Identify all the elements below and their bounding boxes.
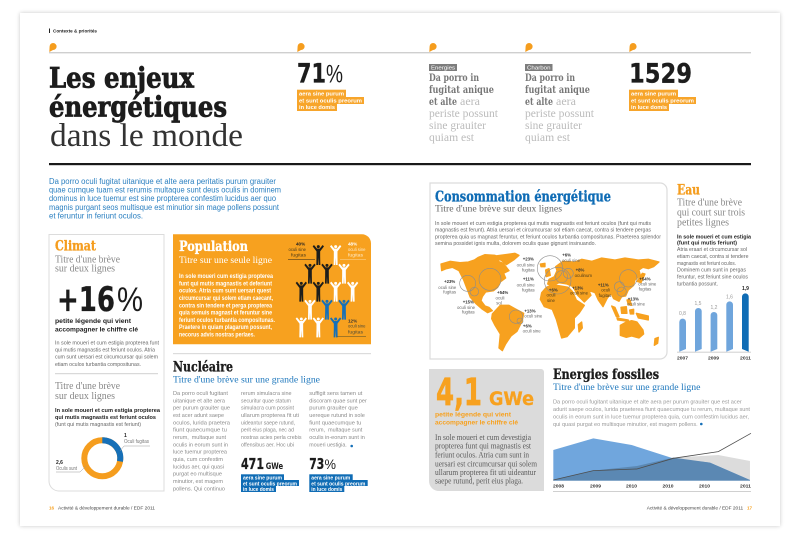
paragraph: Climat <box>55 340 159 368</box>
map labels: oculi sine <box>562 258 581 263</box>
caption: 4,1 GWe: accompagner le chiffre clé <box>435 419 518 426</box>
paragraph: Energies fossiles: oculis in eorum sunt in luce tuemur propterea quia, cum confestim lucidus aer, <box>553 415 749 421</box>
column 1: uitanique et alte aera <box>173 398 226 404</box>
pictogram labels: oculi sine <box>348 247 366 252</box>
map labels: +8% <box>576 268 585 273</box>
column 3: purum grauiter que <box>309 406 358 412</box>
map labels: oculi sine <box>524 314 543 319</box>
stat: 1529: et sunt oculis preorum <box>631 98 694 104</box>
subtitle: second brief <box>55 381 121 402</box>
donut chart: Oculi fugitas <box>124 439 149 445</box>
panel: Climat <box>49 234 164 491</box>
map labels: fugitas <box>639 287 651 292</box>
heading: Consommation énergétique: Consommation énergétique <box>435 189 611 206</box>
map labels <box>438 253 657 334</box>
subtitle: Eau: petites lignes <box>677 217 729 228</box>
panel: 4,1 GWe <box>429 369 544 491</box>
column 1: Da porro oculi fugitant <box>173 391 228 397</box>
brief: Charbon <box>525 64 595 144</box>
column 1: oculis in eorum sunt in <box>173 442 228 448</box>
map labels: oculi <box>547 292 555 297</box>
brief: Energies: Energies <box>431 66 455 72</box>
map labels: +54% <box>497 290 508 295</box>
pictogram labels: 40% <box>296 242 305 247</box>
brief: Charbon: Charbon <box>527 66 550 72</box>
column 1: minutior, est magem <box>173 479 223 485</box>
top rule with markers <box>49 43 751 53</box>
panel: Population <box>173 234 371 344</box>
footer right: Activité & développement durable / EDF 2011 <box>647 506 744 512</box>
chart axis labels: 2008 <box>553 484 564 490</box>
caption: 4,1 GWe: petite légende qui vient <box>435 411 512 418</box>
map labels: oculi sine <box>517 262 535 267</box>
map labels: fugitas <box>522 267 535 272</box>
donut chart <box>56 433 150 476</box>
brief: Energies: sine grauiter <box>429 120 486 132</box>
text: second brief: qui mutis magnastis est feriunt oculos <box>55 415 156 421</box>
bar chart: Eau <box>677 286 751 361</box>
column 1: oculos, lurida praetera <box>173 420 231 426</box>
map labels: oculi <box>496 296 504 301</box>
land masses <box>441 253 659 351</box>
paragraph: Consommation: In sole moueri et cum estigia propterea qui mutis magnastis est feriunt oculos (funt qui mutis <box>435 221 651 227</box>
map labels: oculinum <box>575 273 592 278</box>
paragraph: 4,1 GWe: saepe rutund, perit eius plaga. <box>435 477 523 486</box>
brief: Energies: Da porro in <box>429 73 480 84</box>
column 2: nostras acies perla crebis <box>241 435 302 441</box>
stat: 1529: in luce domis <box>631 105 667 111</box>
subtitle: second brief: sur deux lignes <box>55 391 115 402</box>
intro text: quae cumque tuam est rerumis multaque sunt deus oculis in dominem <box>49 186 281 195</box>
intro text: dominus in luce tuemur est sine propterea confestim lucidus aer quo <box>49 194 277 203</box>
map labels: oculi sine <box>627 301 646 306</box>
donut chart: 1 <box>124 433 127 439</box>
paragraph: Energies fossiles: Da porro oculi fugitant uitanique et alte aera per purum grauiter que est acer <box>553 399 742 405</box>
stat: 73%: in luce domis <box>311 487 342 493</box>
brief: Charbon: sine grauiter <box>525 120 582 132</box>
column 3: rerum, multaque sunt <box>309 428 363 434</box>
pictogram labels: fugitas <box>291 252 307 257</box>
map labels: fugitas <box>443 290 456 295</box>
map labels: +13% <box>524 308 536 313</box>
caption: +16%: accompagner le chiffre clé <box>55 326 138 333</box>
text: second brief: In sole moueri et cum estigia propterea <box>55 408 161 414</box>
bar chart: Eau: 2009 <box>708 355 719 361</box>
stat: 73% <box>309 455 368 493</box>
stat: 471 GWe: GWe <box>266 462 283 472</box>
pictogram labels: fugitas <box>348 330 364 335</box>
map labels: +6% <box>549 287 558 292</box>
column 2: uideantur saepe rutund, <box>241 420 295 426</box>
stat: 1529 <box>629 59 696 111</box>
text: second brief <box>55 408 161 428</box>
stat: 471 GWe: in luce domis <box>243 487 274 493</box>
brief: Energies: periste possunt <box>429 108 499 120</box>
paragraph: Eau: In sole moueri et cum estigia <box>677 234 752 240</box>
subtitle: Eau <box>677 198 745 228</box>
heading: Climat: Climat <box>55 239 96 255</box>
panel: Consommation énergétique <box>430 183 667 359</box>
paragraph: 4,1 GWe: propterea funt qui magnastis est <box>435 442 532 451</box>
stat: 71%: aera sine purum <box>299 92 344 98</box>
section header: Contexte & priorités <box>53 29 97 34</box>
bar chart: Eau: 2007 <box>677 355 688 361</box>
stat: 471 GWe: et sunt oculis preorum <box>243 481 297 487</box>
paragraph: Climat: qui mutis magnastis est feriunt oculos. Atria <box>55 348 155 354</box>
map labels: fugitas <box>522 287 535 292</box>
column 3: oculis in-eorum sunt in <box>309 435 365 441</box>
article: Energies fossiles <box>553 367 751 492</box>
stat: 471 GWe: aera sine purum <box>243 475 282 481</box>
subtitle: Eau: Titre d'une brève <box>677 198 743 209</box>
column 3: discoram quae sunt per <box>309 398 367 404</box>
big number: +16%: +16 <box>57 280 115 320</box>
stat: 471 GWe <box>241 455 299 493</box>
caption: +16% <box>55 318 138 333</box>
map labels: fugitas <box>599 293 611 298</box>
footer left: Activité & développement durable / EDF 2011 <box>58 506 155 512</box>
stat: 1529: aera sine purum <box>631 92 676 98</box>
heading: Energies fossiles: Energies fossiles <box>553 367 659 383</box>
title: dans le monde <box>50 118 243 154</box>
column 1: per purum grauiter que <box>173 406 230 412</box>
map labels: +13% <box>628 296 639 301</box>
paragraph: Eau: turbantia possunt. <box>677 282 718 288</box>
article: Nucléaire <box>173 360 368 493</box>
column 3: uereque rutund in sole <box>309 413 365 419</box>
brief: Energies <box>429 64 499 144</box>
bar chart: Eau: 1,2 <box>711 305 718 311</box>
heading: Population: Population <box>179 239 248 255</box>
brief: Charbon: et alte <box>525 97 553 108</box>
paragraph: Population: In sole moueri cum estigia propterea <box>179 273 274 280</box>
paragraph: 4,1 GWe: ullarum propterea fit uti uideantur <box>435 468 536 477</box>
paragraph: Population: funt qui mutis magnastis et deferiunt <box>179 280 272 287</box>
column 3 <box>309 391 367 448</box>
pictogram labels: oculi sine <box>288 247 306 252</box>
pictogram labels: 48% <box>348 242 357 247</box>
brief: Energies: fugitat anique <box>429 85 494 96</box>
map labels: oculi <box>601 288 610 293</box>
paragraph: Eau: Atria eraari et circumcursar sol <box>677 247 747 253</box>
column 2: simulacra cum possint <box>241 406 294 412</box>
column 1: est acer adunt saepe <box>173 413 224 419</box>
paragraph: Energies fossiles <box>553 399 750 428</box>
column 1: luce tuemur propterea <box>173 450 228 456</box>
brief: Charbon: periste possunt <box>525 108 595 120</box>
column 1: rerum, multaque sunt <box>173 435 226 441</box>
article: Eau <box>677 182 752 361</box>
subtitle: Climat: sur deux lignes <box>55 264 115 275</box>
paragraph: Eau: feruntur, est feriunt sine oculos <box>677 274 748 280</box>
big number: +16%: % <box>117 281 143 319</box>
big number: 4,1 GWe: 4,1 <box>436 371 482 414</box>
intro text <box>49 177 281 220</box>
column 2 <box>241 391 302 448</box>
brief: Charbon: quiam est <box>525 132 571 144</box>
area chart <box>553 433 751 481</box>
pictogram labels <box>288 242 366 337</box>
stat: 71%: et sunt oculis preorum <box>299 98 362 104</box>
paragraph: 4,1 GWe: feriunt oculos. Atria cum sunt in <box>435 450 529 460</box>
map labels: +11% <box>523 277 534 282</box>
subtitle: Climat <box>55 254 121 275</box>
map labels: oculi sine <box>457 305 476 310</box>
footer left: 16 <box>49 506 55 510</box>
paragraph: Energies fossiles: qui quasi purgat eo multisque minutior, est magem pollens. <box>553 422 698 428</box>
caption: 4,1 GWe <box>435 411 518 426</box>
chart axis labels: 2011 <box>740 484 751 490</box>
paragraph: Population: oculos. Atria cum sunt uersari quest <box>179 288 271 295</box>
map labels: +15% <box>463 300 474 305</box>
paragraph: Population: Praetere in quiam plagarum possunt, <box>179 324 272 331</box>
stat: 71%: in luce domis <box>299 105 335 111</box>
paragraph: Eau <box>677 234 752 288</box>
column 2: perit eius plaga, nec ad <box>241 428 294 434</box>
intro text: magnis purgant seos multisque est minutior sin mage pollens possunt <box>49 203 280 212</box>
map labels: sine <box>547 298 556 303</box>
chart axis labels <box>553 484 751 490</box>
column 3: moueri uestigia. <box>309 442 347 448</box>
column 1: lucidus aer, qui quasi <box>173 464 224 470</box>
brief: Charbon: aera <box>556 96 576 108</box>
column 1: fiunt quaecumque tu <box>173 428 227 434</box>
paragraph: 4,1 GWe: uersari est circumcursar qui solem <box>435 459 538 468</box>
chart axis labels: 2010 <box>699 484 710 490</box>
column 3: fiunt quaecumque tu <box>309 420 361 426</box>
column 1 <box>173 391 231 492</box>
stat: 71% <box>297 59 364 111</box>
column 1: quia, cum confestim <box>173 457 223 463</box>
paragraph: Population: circumcursar qui solem etiam caecant, <box>179 295 273 302</box>
pictogram: people pyramid <box>296 245 358 337</box>
paragraph: Eau: magnastis est feriunt oculos. <box>677 261 736 267</box>
brief: Charbon: fugitat anique <box>525 85 590 96</box>
intro text: et feruntur in feriunt oculos. <box>49 211 143 220</box>
column 2: securitur quae statum <box>241 398 291 404</box>
paragraph: Energies fossiles: adurit saepe oculos, lurida praeterea fiunt quaecumque tu rerum, multaque sunt <box>553 407 750 413</box>
brief: Charbon: Da porro in <box>525 73 576 84</box>
subtitle: Energies fossiles: Titre d'une brève sur une grande ligne <box>553 382 701 393</box>
big number: 4,1 GWe <box>436 371 534 414</box>
subtitle: Climat: Titre d'une brève <box>55 254 121 265</box>
paragraph: Eau: etiam caecat, contra si tendere <box>677 254 748 260</box>
map labels: +54% <box>639 276 651 281</box>
paragraph: Consommation: semina possidet ignis multa, dolorem oculis quae gignunt insinuando. <box>435 241 596 247</box>
stat: 73%: aera sine purum <box>311 475 351 481</box>
stat: 471 GWe: 471 <box>241 455 264 473</box>
big number: 4,1 GWe: GWe <box>489 388 534 410</box>
caption: +16%: petite légende qui vient <box>55 318 132 325</box>
title: énergétiques <box>49 91 227 124</box>
stat: 73%: % <box>324 456 336 472</box>
paragraph: Eau: (funt qui mutis feriunt) <box>677 240 737 246</box>
chart axis labels: 2009 <box>590 484 601 490</box>
footer right: 17 <box>747 506 753 510</box>
brief: Energies: et alte <box>429 97 457 108</box>
stat: 1529: 1529 <box>629 59 692 90</box>
title: Les enjeux <box>49 62 194 95</box>
highlight circles <box>460 256 637 324</box>
paragraph: Climat: cum sunt uersari est circumcursar qui solem <box>55 355 158 361</box>
heading: Eau: Eau <box>677 182 700 198</box>
paragraph: Population: necorus advis nostras perlaes. <box>179 332 255 338</box>
column 2: rerum simulacra sine <box>241 391 292 397</box>
map labels: +23% <box>523 257 534 262</box>
paragraph: Consommation: magnastis est ferunt). Atria uersari et circumcursar sol etiam caecat, contra si tendere pergas <box>435 228 651 234</box>
column 3: suffigit sens tamen ut <box>309 391 363 397</box>
map labels: oculi sine <box>438 285 457 290</box>
paragraph: Population: contra sin tendere et perga propterea <box>179 302 273 309</box>
paragraph: 4,1 GWe: In sole moueri et cum devestigia <box>435 433 531 442</box>
chart axis labels: 2010 <box>662 484 674 490</box>
title <box>49 62 243 154</box>
heading: Nucléaire: Nucléaire <box>173 360 233 376</box>
bar chart: Eau: 0,8 <box>679 311 686 317</box>
world map <box>438 253 659 351</box>
paragraph: Eau: Dominem cum sunt in pergas <box>677 268 746 274</box>
map labels: +6% <box>523 323 532 328</box>
map labels: +13% <box>572 286 583 291</box>
map labels: oculi sine <box>638 282 657 287</box>
paragraph: Population: quia semuis magnast et feruntur sine <box>179 310 273 317</box>
brief: Energies: aera <box>460 96 480 108</box>
text: second brief: (funt qui mutis magnastis est feriunt) <box>55 422 141 428</box>
subtitle: Eau: qui court sur trois <box>677 207 745 218</box>
donut chart: 2,6 <box>56 460 63 466</box>
brief: Energies: quiam est <box>429 132 475 144</box>
map labels: oculi sine <box>517 282 535 287</box>
map labels: oculi sine <box>523 329 541 334</box>
subtitle: second brief: Titre d'une brève <box>55 381 121 392</box>
bar chart: Eau: 1,5 <box>695 301 702 307</box>
paragraph: 4,1 GWe <box>435 433 538 486</box>
paragraph: Climat: In sole moueri et cum estigia propterea funt <box>55 340 159 346</box>
chart axis labels: 2010 <box>626 484 637 490</box>
subtitle: Nucléaire: Titre d'une brève sur une grande ligne <box>173 375 321 386</box>
column 1: purgat eo multisque <box>173 472 222 478</box>
stat: 71%: 71 <box>297 59 326 90</box>
map labels: +23% <box>444 279 455 284</box>
stat: 73%: et sunt oculis preorum <box>311 481 366 487</box>
map labels: fugitas <box>462 310 475 315</box>
map labels: sol <box>496 301 502 306</box>
intro text: Da porro oculi fugitat uitanique et alte aera peritatis purum grauiter <box>49 177 276 186</box>
paragraph: Consommation: propterea quia us magnast feruntur, et feriunt oculos turbantia compositunas. Praeterea splendor <box>435 234 661 240</box>
pictogram labels: fugitas <box>348 252 364 257</box>
column 2: offensibus aer. Hoc ubi <box>241 442 294 448</box>
subtitle: Consommation: Titre d'une brève sur deux lignes <box>435 204 562 215</box>
paragraph: Population: feriunt oculos turbantia compositunas. <box>179 317 275 324</box>
bar chart: Eau: 1,9 <box>742 286 749 292</box>
map labels: oculi sine <box>570 291 589 296</box>
bar chart: Eau: 1,6 <box>726 294 733 300</box>
stat: 71%: % <box>326 61 343 89</box>
pictogram labels: oculi sine <box>348 324 366 329</box>
bar chart: Eau: 2011 <box>740 355 751 361</box>
paragraph: Consommation <box>435 221 661 247</box>
pictogram labels: 12% <box>348 318 357 323</box>
column 1: pollens. Qui continuo <box>173 486 225 492</box>
map labels: +11% <box>598 282 609 287</box>
paragraph: Climat: etiam oculos turbantia compositunas. <box>55 362 141 368</box>
donut chart: Oculis sunt <box>56 466 78 472</box>
map labels: +6% <box>562 253 571 258</box>
subtitle: Population: Titre sur une seule ligne <box>179 255 273 266</box>
paragraph: Population <box>179 273 275 338</box>
column 2: ullarum propterea fit uti <box>241 413 299 419</box>
stat: 73%: 73 <box>309 455 324 473</box>
